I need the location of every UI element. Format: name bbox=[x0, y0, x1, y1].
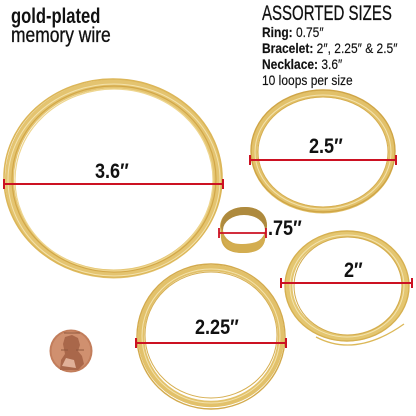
wire loop 2 inch bbox=[285, 231, 409, 345]
measure lines bbox=[4, 155, 412, 348]
label 2: 2″ bbox=[344, 259, 363, 282]
label 3.6: 3.6″ bbox=[95, 160, 129, 183]
label 2.25: 2.25″ bbox=[195, 316, 239, 339]
label .75: .75″ bbox=[268, 217, 302, 240]
heading: assorted sizes: ASSORTED SIZES bbox=[262, 2, 392, 25]
penny bbox=[50, 330, 92, 372]
size list: Necklace: 3.6″ bbox=[262, 56, 342, 72]
label 2.5: 2.5″ bbox=[309, 135, 343, 158]
sizes block bbox=[262, 2, 398, 88]
heading: gold-plated memory wire bbox=[11, 5, 111, 47]
size list: Ring: 0.75″ bbox=[262, 24, 324, 40]
size list bbox=[262, 24, 398, 88]
ring 0.75 inch bbox=[220, 207, 267, 253]
heading line 2: memory wire bbox=[11, 24, 111, 47]
wire loop 2.25 inch bbox=[137, 264, 285, 409]
large wire loop 3.6 inch bbox=[4, 79, 222, 277]
size list: Bracelet: 2″, 2.25″ & 2.5″ bbox=[262, 40, 397, 56]
wire loop 2.5 inch bbox=[251, 90, 395, 212]
size list: 10 loops per size bbox=[262, 72, 353, 88]
heading line 1: gold-plated bbox=[11, 5, 100, 28]
